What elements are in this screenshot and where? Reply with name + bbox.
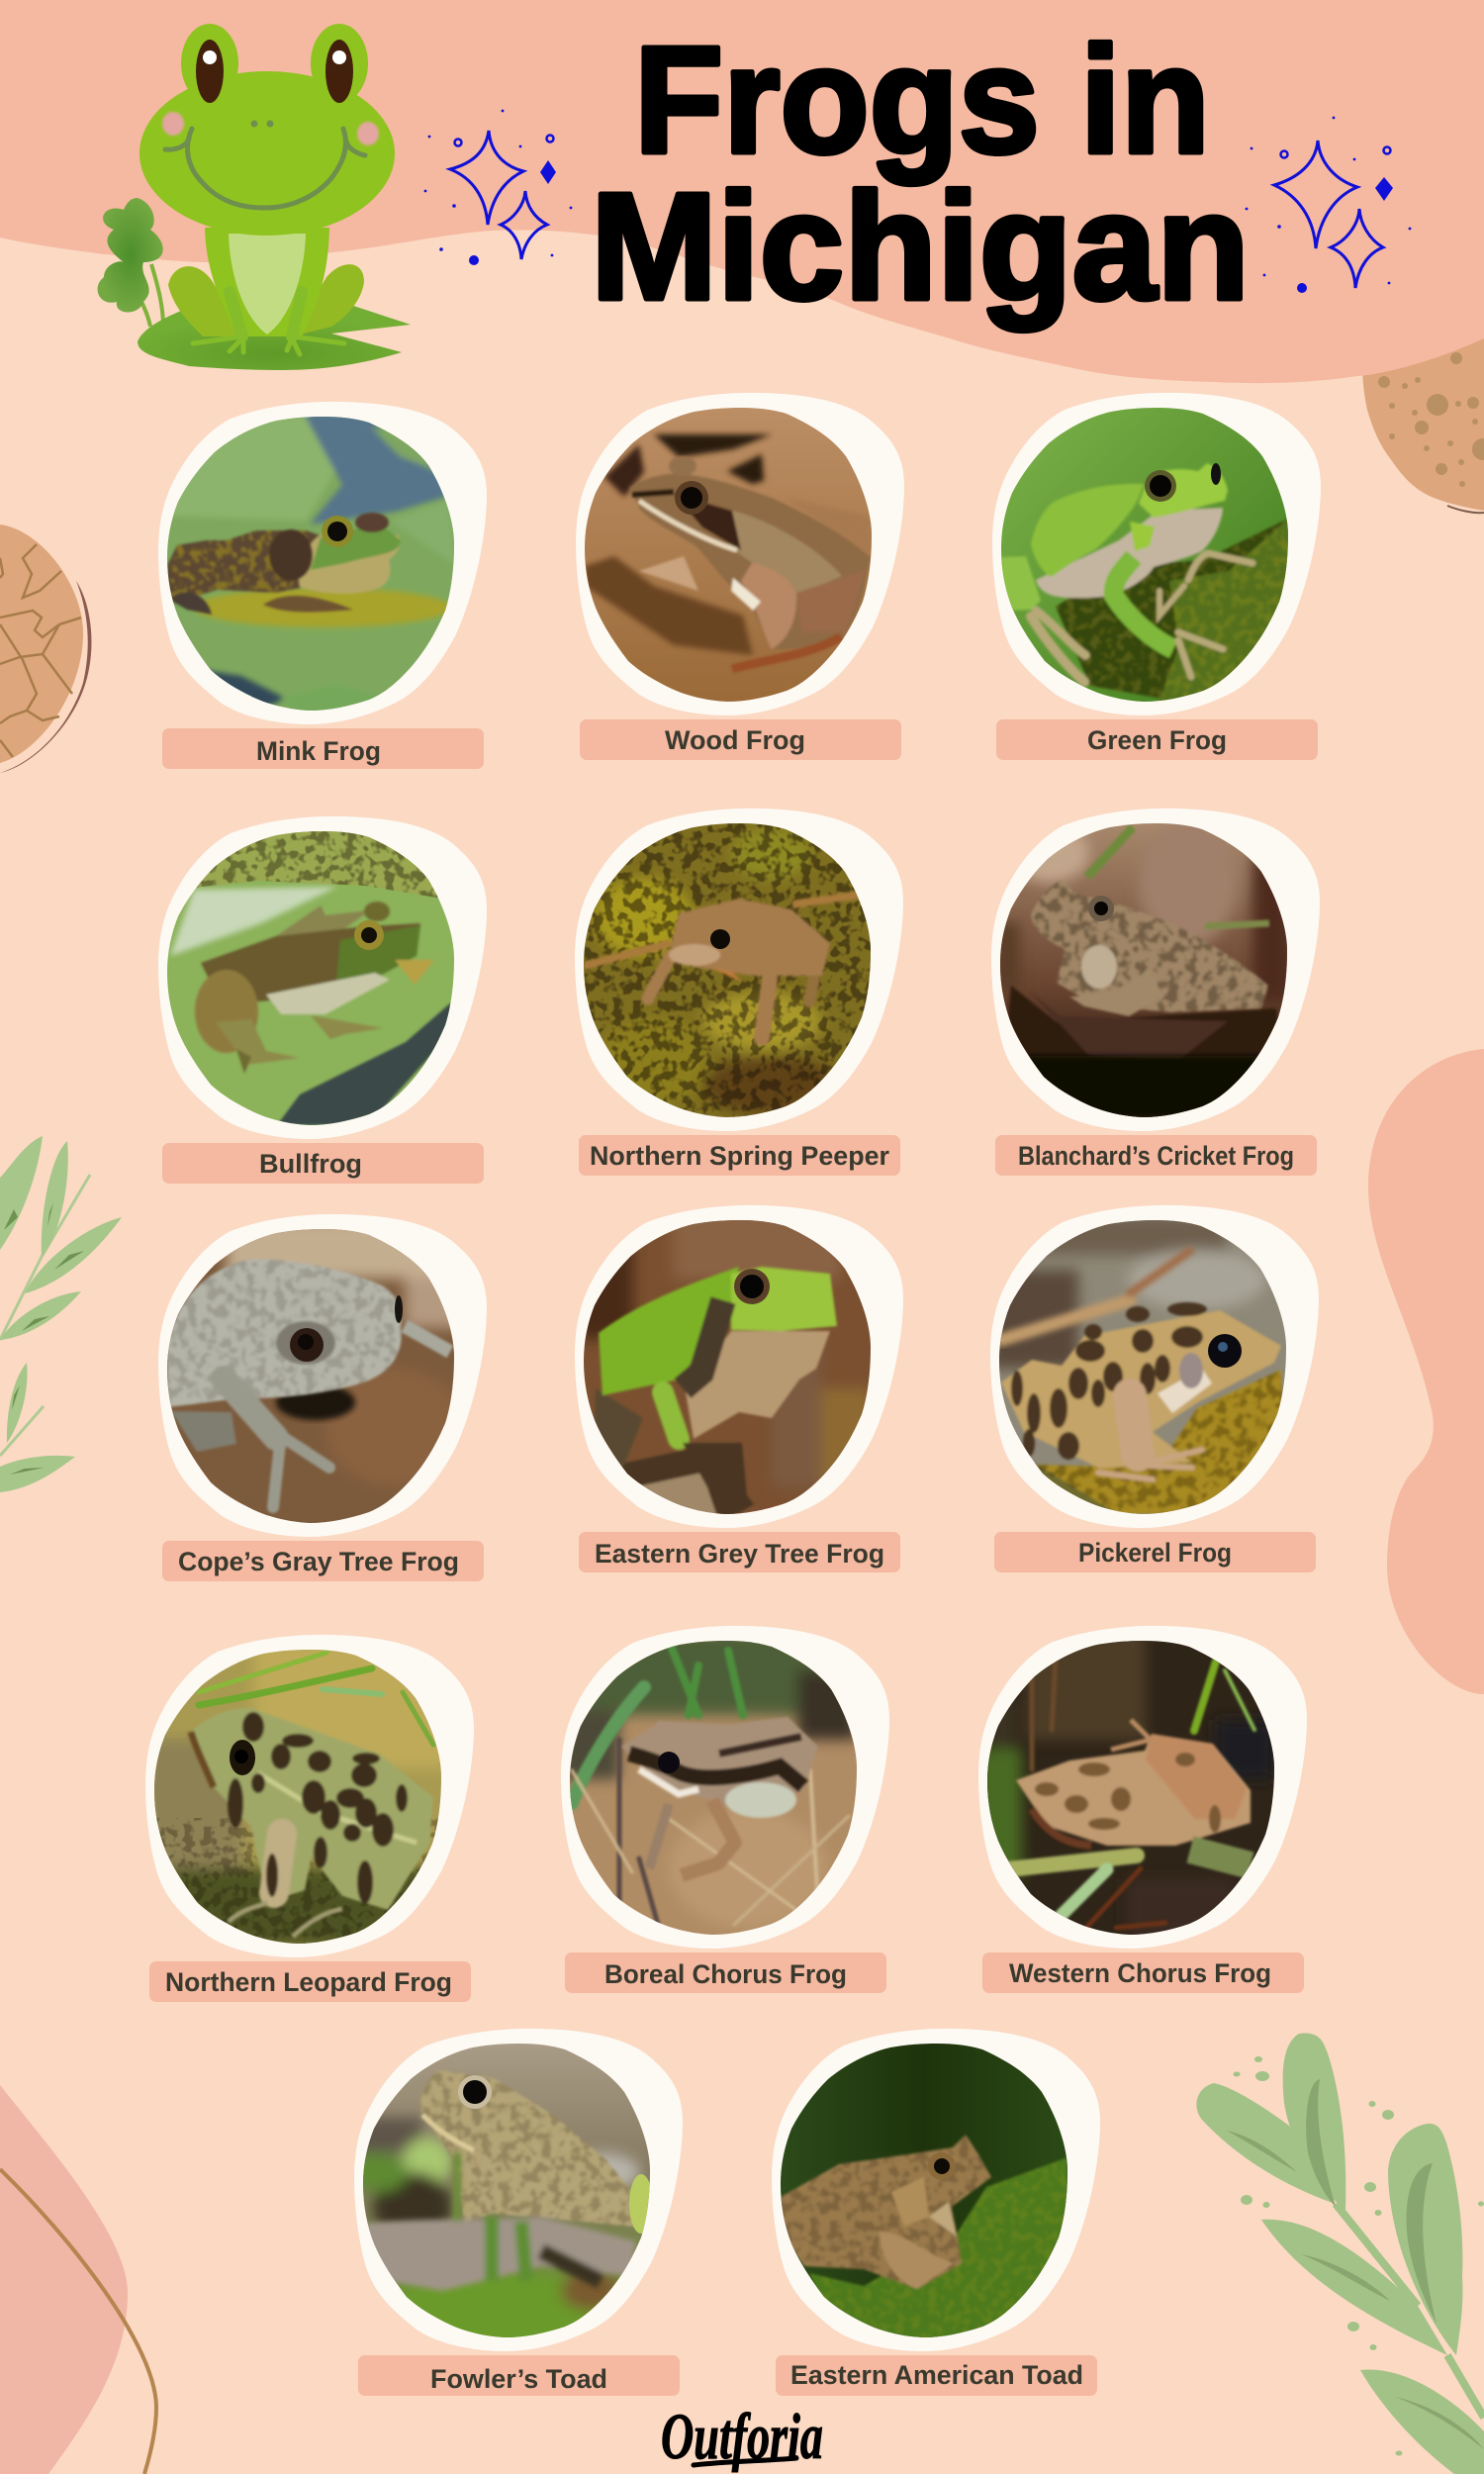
- label: Mink Frog: [162, 728, 484, 769]
- icon: left sparkles: [424, 110, 572, 265]
- icon: clover: [98, 198, 163, 327]
- label: Fowler's Toad: Fowler’s Toad: [430, 2364, 607, 2394]
- label: Eastern Grey Tree Frog: Eastern Grey Tree Frog: [595, 1539, 884, 1569]
- label: Eastern American Toad: Eastern American Toad: [790, 2360, 1083, 2390]
- card: Eastern American Toad: [772, 2029, 1100, 2396]
- card: Pickerel Frog: [989, 1205, 1319, 1572]
- card: Boreal Chorus Frog: [560, 1626, 889, 1993]
- label: Cope's Gray Tree Frog: Cope’s Gray Tree Frog: [178, 1547, 459, 1576]
- label: Fowler's Toad: [358, 2355, 680, 2396]
- card: Wood Frog: [576, 393, 904, 760]
- label: Green Frog: [996, 719, 1318, 760]
- decoration: cracked earth blob: [0, 524, 91, 773]
- header wave: [0, 0, 1484, 383]
- title: Frogs in: [634, 15, 1210, 185]
- photo: green frog: [1001, 408, 1288, 702]
- photo: cricket frog: [995, 818, 1292, 1117]
- label: Pickerel Frog: [994, 1532, 1316, 1572]
- label: Pickerel Frog: Pickerel Frog: [1078, 1538, 1232, 1568]
- logo: Outforia: [661, 2401, 823, 2473]
- card: Western Chorus Frog: [977, 1626, 1307, 1993]
- label: Boreal Chorus Frog: [565, 1952, 886, 1993]
- photo: spring peeper: [584, 823, 871, 1117]
- photo: eastern grey tree frog: [574, 1210, 871, 1517]
- decoration: bottom-left thin arc: [0, 2169, 156, 2474]
- photo: boreal chorus frog: [560, 1631, 857, 1935]
- label: Blanchard's Cricket Frog: Blanchard’s Cricket Frog: [1018, 1141, 1294, 1171]
- card: Cope's Gray Tree Frog: [158, 1214, 487, 1581]
- illustration: cartoon frog on lily pad: [98, 24, 411, 370]
- photo: eastern american toad: [781, 2044, 1067, 2340]
- label: Mink Frog: Mink Frog: [256, 736, 381, 766]
- label: Northern Spring Peeper: Northern Spring Peeper: [590, 1141, 889, 1171]
- decoration: bottom-right leaves: [1196, 2034, 1484, 2474]
- logo: Outforia: Outforia: [661, 2401, 823, 2473]
- decoration: bottom-left pink blob: [0, 2085, 128, 2474]
- photo: fowler's toad: [348, 2044, 653, 2350]
- label: Bullfrog: Bullfrog: [259, 1149, 362, 1179]
- decoration: left leaves: [0, 1136, 122, 1492]
- icon: right sparkles: [1246, 117, 1411, 293]
- card: Eastern Grey Tree Frog: [574, 1205, 903, 1572]
- card: Fowler's Toad: [348, 2029, 683, 2396]
- label: Eastern Grey Tree Frog: [579, 1532, 900, 1572]
- label: Wood Frog: Wood Frog: [665, 725, 805, 755]
- label: Northern Leopard Frog: Northern Leopard Frog: [165, 1967, 452, 1997]
- label: Eastern American Toad: [776, 2355, 1097, 2396]
- photo: pickerel frog: [989, 1215, 1286, 1514]
- label: Bullfrog: [162, 1143, 484, 1184]
- photo: bullfrog: [167, 831, 454, 1125]
- label: Northern Leopard Frog: [149, 1961, 471, 2002]
- decoration: right peach blob: [1368, 1049, 1484, 1694]
- photo: northern leopard frog: [154, 1650, 441, 1944]
- label: Western Chorus Frog: Western Chorus Frog: [1009, 1958, 1271, 1988]
- label: Green Frog: Green Frog: [1087, 725, 1227, 755]
- card: Mink Frog: [158, 402, 487, 769]
- photo: cope's gray tree frog: [167, 1219, 464, 1523]
- label: Wood Frog: [580, 719, 901, 760]
- decoration: speckled brown blob: [1362, 297, 1484, 513]
- label: Northern Spring Peeper: [579, 1135, 900, 1176]
- title: [591, 15, 1250, 332]
- card: Blanchard's Cricket Frog: [991, 809, 1320, 1176]
- label: Boreal Chorus Frog: Boreal Chorus Frog: [604, 1959, 847, 1989]
- card: Northern Leopard Frog: [144, 1635, 474, 2002]
- icon: lily pad: [138, 305, 411, 370]
- label: Western Chorus Frog: [982, 1952, 1304, 1993]
- card: Bullfrog: [158, 816, 487, 1184]
- photo: mink frog: [167, 412, 456, 714]
- label: Cope's Gray Tree Frog: [162, 1541, 484, 1581]
- card: Northern Spring Peeper: [575, 809, 903, 1176]
- title: Michigan: [591, 161, 1250, 332]
- label: Blanchard's Cricket Frog: [995, 1135, 1317, 1176]
- photo: western chorus frog: [977, 1631, 1274, 1938]
- photo: wood frog: [585, 408, 872, 702]
- card: Green Frog: [992, 393, 1321, 760]
